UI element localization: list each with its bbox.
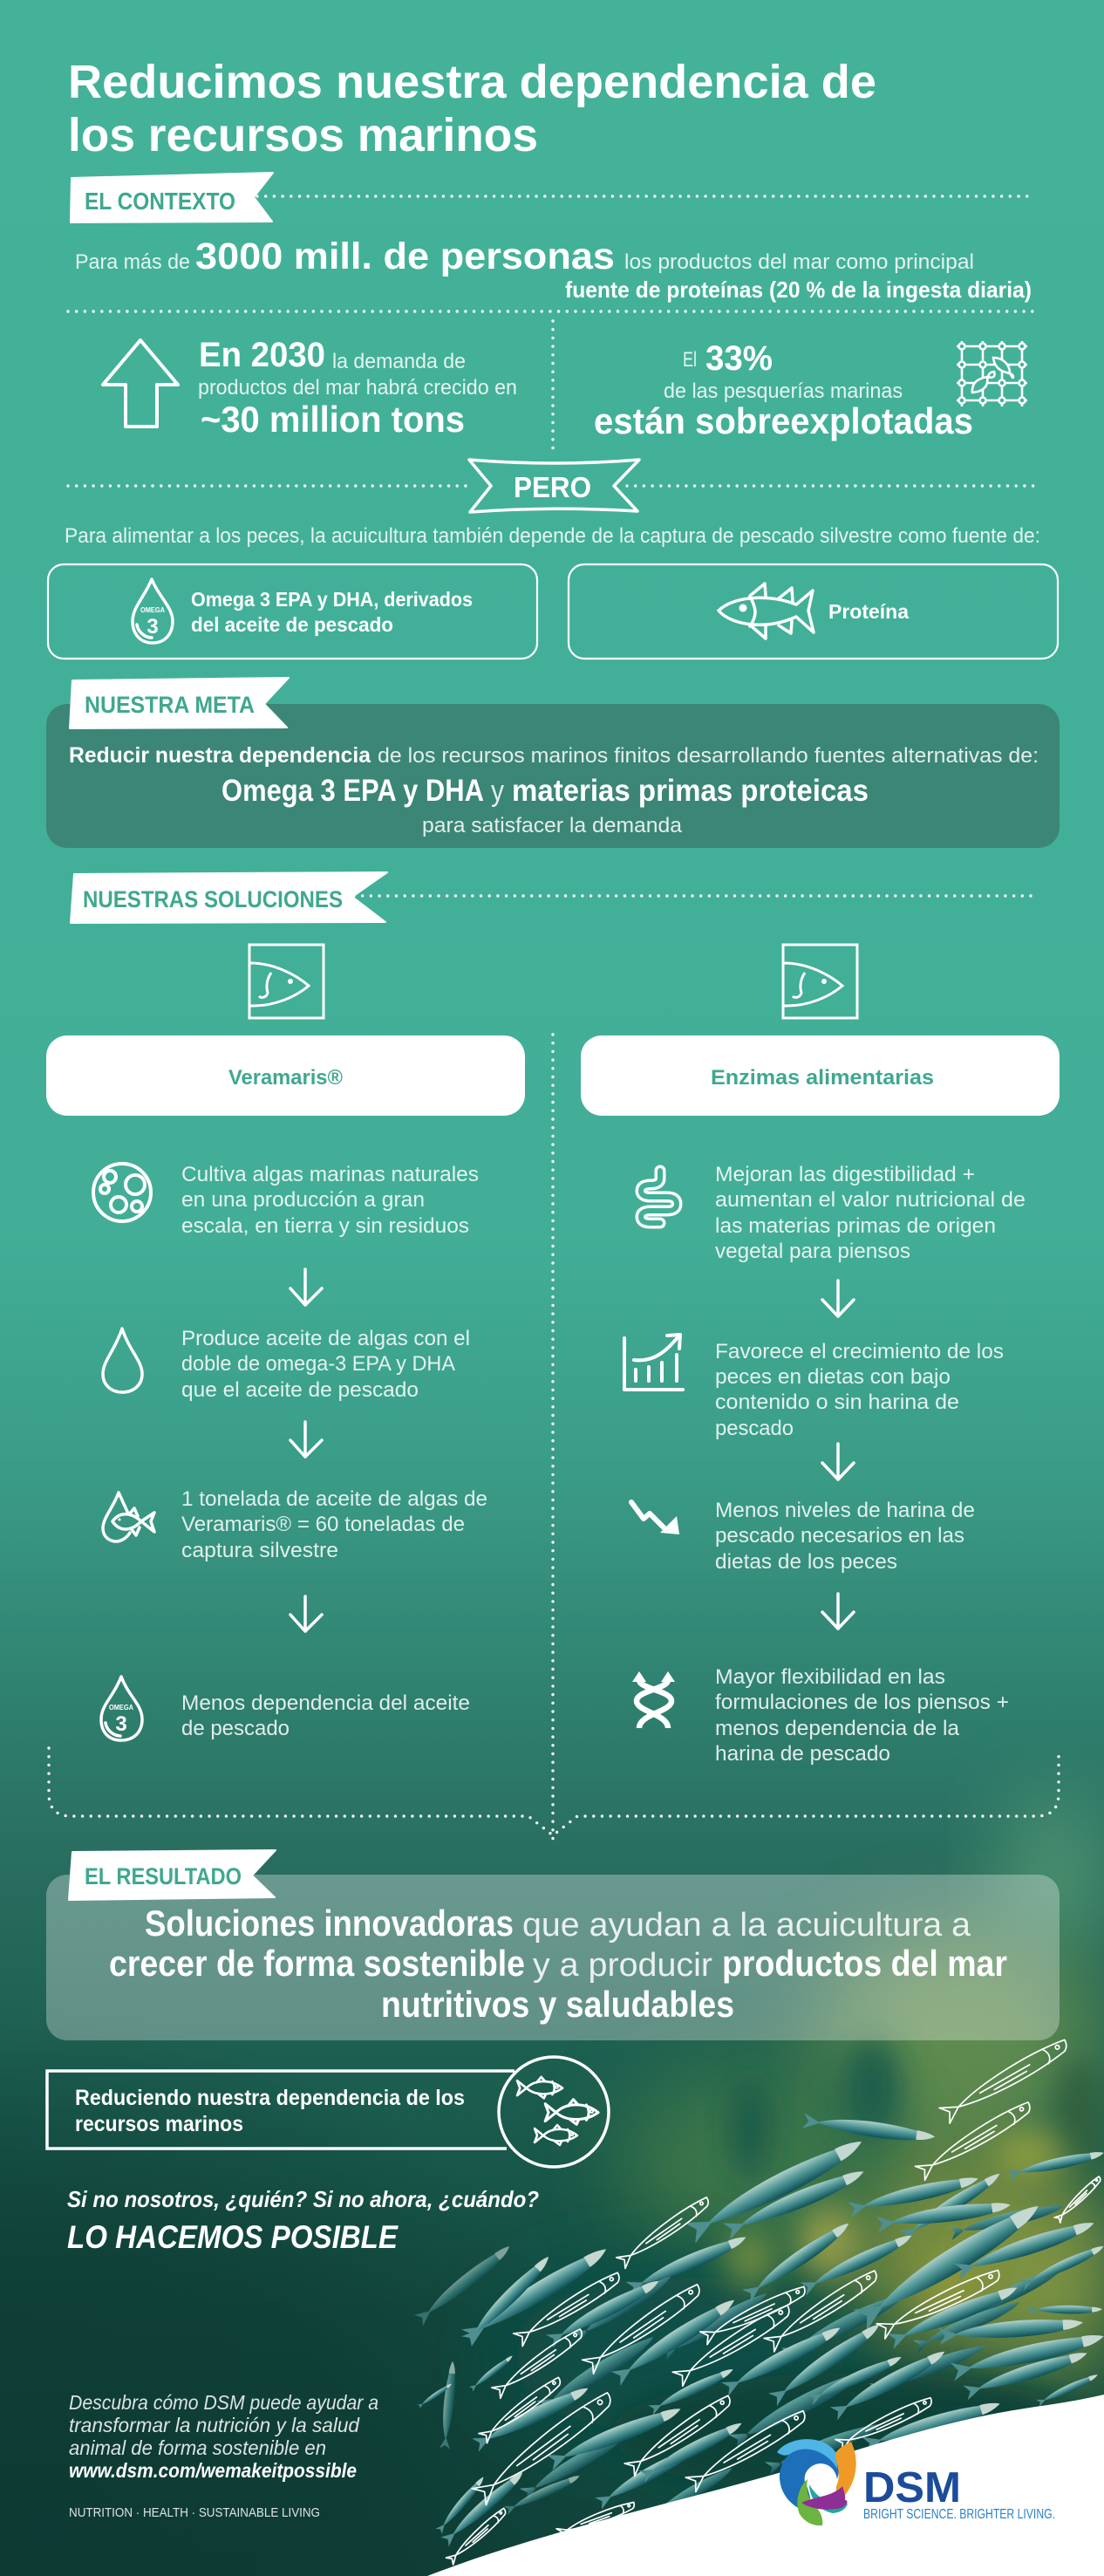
text: cultiva: [181, 1163, 479, 1238]
text block: 33% overexploited: de las pesquerías marinas: [664, 379, 903, 403]
text: footer tagline: NUTRITION · HEALTH · SUSTAINABLE LIVING: [69, 2505, 320, 2520]
panel: nuestra meta: Reducir nuestra dependencia: [69, 743, 371, 768]
text: mayor flexibilidad: formulaciones de los piensos +: [715, 1691, 1009, 1714]
text: favorece: Favorece el crecimiento de los: [715, 1340, 1004, 1363]
text: favorece: peces en dietas con bajo: [715, 1365, 951, 1389]
icon: omega drop: 3: [147, 615, 159, 639]
banner: nuestras soluciones: NUESTRAS SOLUCIONES: [83, 886, 343, 912]
icon: omega drop: OMEGA: [140, 606, 165, 614]
text: call to action: transformar la nutrición y la salud: [69, 2414, 360, 2436]
swimming fish: [414, 2113, 1104, 2546]
panel: nuestra meta: para satisfacer la demanda: [422, 814, 683, 837]
text block: 33% overexploited: están sobreexplotadas: [594, 400, 973, 441]
text block: 33% overexploited: 33%: [705, 339, 773, 378]
card: veramaris: Veramaris®: [228, 1066, 343, 1090]
text block: 3000 million people: 3000 mill. de personas: [195, 236, 615, 277]
banner: nuestra meta: [70, 678, 289, 728]
logo: DSM: DSM: [863, 2464, 961, 2511]
panel: el resultado: Soluciones innovadoras: [145, 1903, 514, 1944]
icon: drop with fish: [103, 1493, 154, 1541]
logo: DSM: [777, 2439, 1055, 2525]
text block: 33% overexploited: [594, 339, 973, 441]
text block: 3000 million people: [75, 236, 1032, 303]
panel: el resultado: y a producir: [533, 1947, 712, 1984]
text: favorece: [715, 1340, 1004, 1440]
arrow: [822, 1281, 854, 1316]
icon: omega drop: 3: [115, 1712, 127, 1736]
text block: 33% overexploited: El: [683, 348, 697, 372]
text block: 2030 demand: ~30 million tons: [201, 399, 465, 440]
text: call to action: Descubra cómo DSM puede ayudar a: [69, 2391, 378, 2414]
icon: fish: [719, 584, 814, 639]
slogan: [67, 2186, 539, 2255]
banner: nuestra meta: NUESTRA META: [85, 692, 255, 718]
text: mejoran: vegetal para piensos: [715, 1240, 910, 1263]
banner: el contexto: EL CONTEXTO: [85, 188, 235, 215]
text block: 3000 million people: fuente de proteínas (20 % de la ingesta diaria): [565, 277, 1032, 303]
text: mejoran: aumentan el valor nutricional de: [715, 1188, 1026, 1212]
panel: nuestra meta: de los recursos marinos finitos desarrollando fuentes alternativas de:: [378, 744, 1039, 768]
icon: algae cell: [93, 1164, 151, 1221]
panel: nuestra meta: materias primas proteicas: [512, 774, 869, 808]
text: call to action: www.dsm.com/wemakeitpossible: [69, 2459, 357, 2482]
panel: nuestra meta: Omega 3 EPA y DHA: [221, 774, 484, 808]
icon: omega drop: [101, 1677, 142, 1740]
icon: three fish: [517, 2077, 598, 2145]
text block: 2030 demand: [198, 336, 517, 440]
text: produce: doble de omega-3 EPA y DHA: [181, 1352, 455, 1376]
banner: pero: [469, 460, 639, 512]
banner: nuestras soluciones: [71, 872, 387, 923]
icon: decline arrow: [631, 1502, 679, 1534]
text: mayor flexibilidad: harina de pescado: [715, 1742, 890, 1766]
icon: up arrow: [103, 340, 178, 427]
text: menos dependencia: de pescado: [181, 1717, 290, 1740]
text: tonelada: [181, 1487, 487, 1562]
text: mejoran: Mejoran las digestibilidad +: [715, 1163, 975, 1186]
icon: drop: [103, 1329, 142, 1392]
text: menos niveles: Menos niveles de harina de: [715, 1499, 975, 1522]
text: tonelada: captura silvestre: [181, 1539, 338, 1562]
callout: reducing dependency: [47, 2057, 609, 2167]
logo mark: [777, 2439, 856, 2525]
slogan: LO HACEMOS POSIBLE: [67, 2219, 399, 2255]
arrow: [822, 1444, 854, 1479]
text block: 3000 million people: los productos del mar como principal: [624, 250, 974, 274]
card: enzimas alimentarias: Enzimas alimentarias: [711, 1066, 934, 1090]
title: los recursos marinos: [68, 109, 538, 161]
text: tonelada: Veramaris® = 60 toneladas de: [181, 1513, 465, 1536]
title: Reducimos nuestra dependencia de: [68, 56, 876, 108]
text: menos niveles: pescado necesarios en las: [715, 1524, 964, 1548]
panel: omega 3: [48, 564, 537, 659]
icon: fish head right: [783, 945, 857, 1018]
text: cultiva: Cultiva algas marinas naturales: [181, 1163, 479, 1186]
banner: el resultado: [69, 1850, 276, 1900]
panel: nuestra meta: y: [491, 775, 504, 808]
text block: 2030 demand: la demanda de: [332, 350, 466, 373]
panel: omega 3: Omega 3 EPA y DHA, derivados: [191, 588, 473, 611]
icon: dna: [632, 1671, 675, 1728]
icon: omega drop: [133, 579, 173, 643]
panel: omega 3: del aceite de pescado: [191, 613, 393, 636]
text: cultiva: en una producción a gran: [181, 1188, 425, 1212]
text: produce: [181, 1327, 470, 1402]
text: mayor flexibilidad: menos dependencia de la: [715, 1717, 960, 1740]
panel: el resultado: nutritivos y saludables: [381, 1984, 734, 2025]
icon: fishing net: [957, 341, 1027, 407]
panel: protein: [569, 564, 1058, 659]
icon: fish head left: [249, 945, 324, 1018]
dotted bracket: [49, 1748, 1059, 1835]
callout: reducing dependency: Reduciendo nuestra dependencia de los: [75, 2086, 465, 2110]
text: menos dependencia: Menos dependencia del aceite: [181, 1691, 470, 1715]
arrow: [822, 1594, 854, 1629]
kelp glow: [0, 1797, 1104, 2576]
arrow: [290, 1269, 322, 1305]
text block: 2030 demand: productos del mar habrá crecido en: [198, 376, 517, 400]
panel: el resultado: productos del mar: [722, 1943, 1007, 1984]
text block: 2030 demand: En 2030: [199, 336, 325, 374]
arrow: [290, 1422, 322, 1457]
text block: 3000 million people: Para más de: [75, 250, 190, 274]
callout: reducing dependency: recursos marinos: [75, 2112, 243, 2136]
text: call to action: [69, 2391, 378, 2482]
panel: protein: Proteína: [828, 600, 909, 623]
white curved corner: [427, 2395, 1104, 2576]
banner: el contexto: [71, 173, 273, 222]
text: mayor flexibilidad: Mayor flexibilidad en las: [715, 1665, 945, 1689]
card: enzimas alimentarias: [581, 1035, 1060, 1116]
banner: pero: PERO: [514, 471, 591, 503]
text: cultiva: escala, en tierra y sin residuos: [181, 1214, 469, 1238]
text: menos niveles: [715, 1499, 975, 1574]
text: favorece: contenido o sin harina de: [715, 1390, 959, 1414]
outlined fish: [446, 2037, 1103, 2566]
icon: intestine: [641, 1171, 677, 1223]
text: menos niveles: dietas de los peces: [715, 1550, 897, 1574]
panel: el resultado: que ayudan a la acuicultura a: [522, 1907, 971, 1944]
underwater photo: kelp and fish school: [0, 1797, 1104, 2576]
text: favorece: pescado: [715, 1417, 794, 1440]
text: produce: que el aceite de pescado: [181, 1378, 419, 1402]
text: produce: Produce aceite de algas con el: [181, 1327, 470, 1350]
text: menos dependencia: [181, 1691, 470, 1740]
icon: growth chart: [624, 1335, 683, 1390]
text: aquaculture dependency: Para alimentar a los peces, la acuicultura también depende de la captura de pescado silvestre como fuente de:: [65, 524, 1040, 548]
banner: el resultado: EL RESULTADO: [85, 1863, 242, 1889]
card: veramaris: [46, 1035, 525, 1116]
icon: omega drop: OMEGA: [109, 1704, 133, 1712]
panel: nuestra meta: [46, 704, 1060, 848]
text: call to action: animal de forma sostenible en: [69, 2436, 326, 2459]
text: mejoran: [715, 1163, 1026, 1263]
background fish: [520, 2200, 1067, 2526]
text: mejoran: las materias primas de origen: [715, 1214, 996, 1238]
arrow: [290, 1596, 322, 1631]
slogan: Si no nosotros, ¿quién? Si no ahora, ¿cuándo?: [67, 2186, 539, 2212]
panel: el resultado: crecer de forma sostenible: [109, 1943, 525, 1984]
text: tonelada: 1 tonelada de aceite de algas de: [181, 1487, 487, 1511]
title: [68, 56, 876, 161]
panel: el resultado: [46, 1875, 1060, 2040]
text: mayor flexibilidad: [715, 1665, 1009, 1766]
